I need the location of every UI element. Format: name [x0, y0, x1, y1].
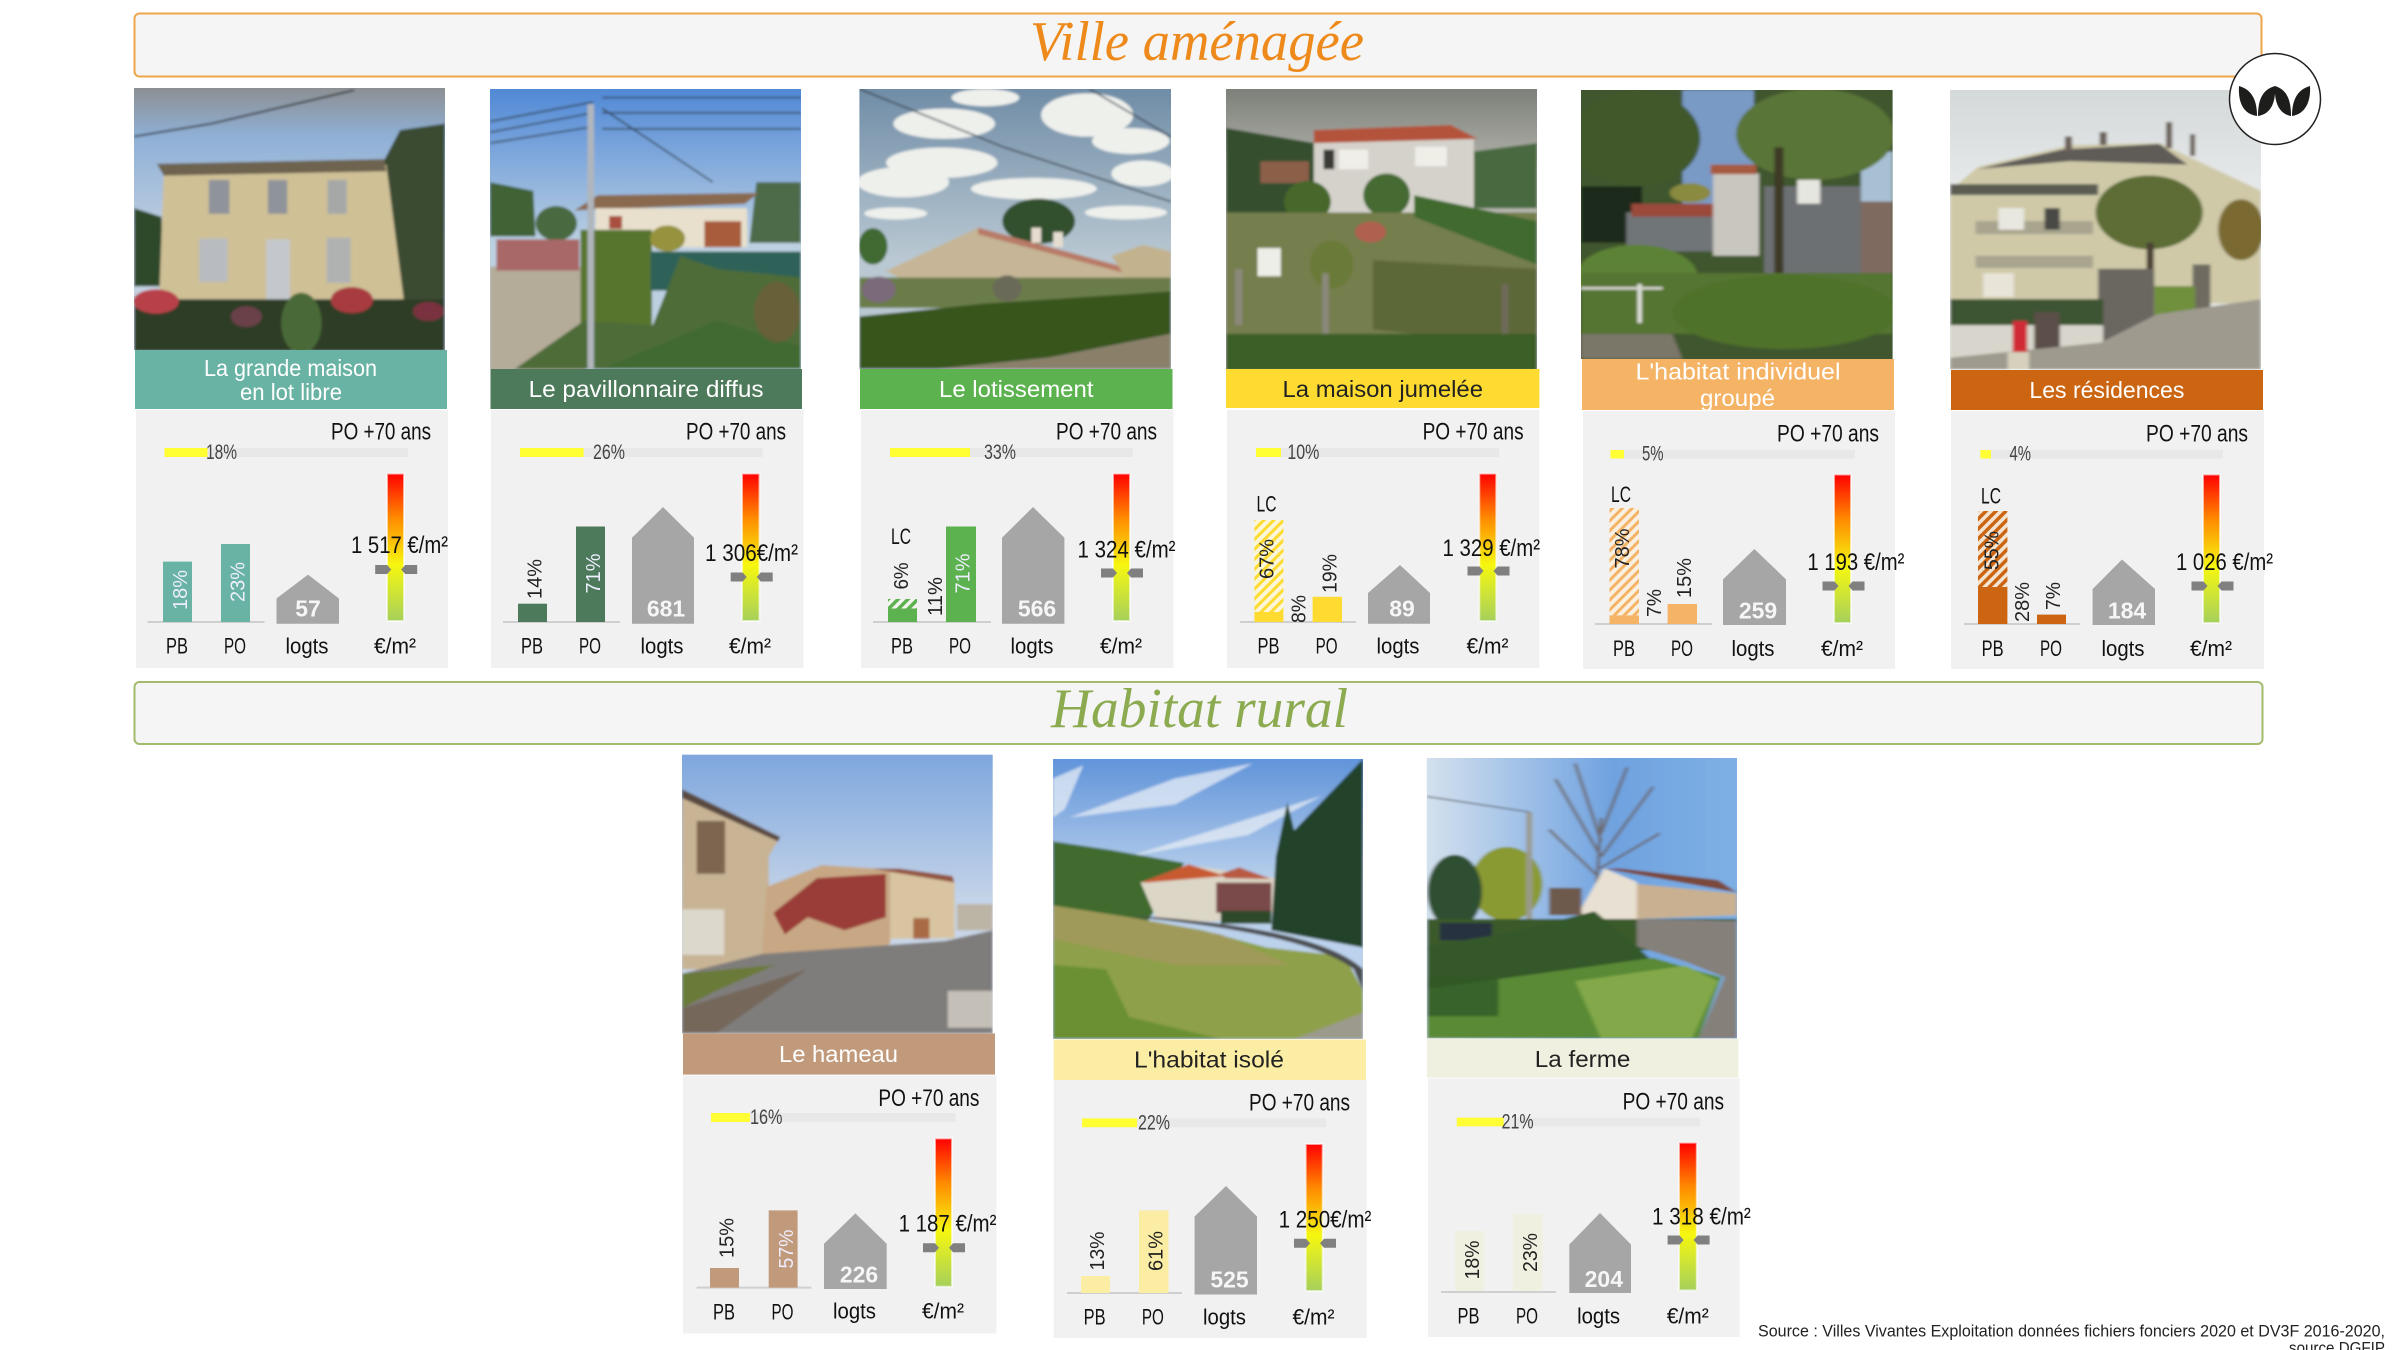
- header: Habitat rural: [134, 678, 2262, 744]
- PB PO bars: 13%: [1087, 1231, 1109, 1270]
- PB LC PO bars: LC: [891, 524, 911, 549]
- PB LC PO bars: [873, 524, 991, 623]
- PB PO bars: [503, 526, 620, 623]
- house logements: 566: [1018, 596, 1056, 622]
- data panel: [1054, 1080, 1371, 1338]
- axis labels: PB: [1458, 1304, 1480, 1328]
- title band: La maison jumelée: [1282, 376, 1483, 402]
- PB LC PO bars: 71%: [953, 553, 975, 594]
- price gauge: 1 318 €/m²: [1652, 1204, 1751, 1230]
- PO +70 ans gauge: [890, 418, 1157, 464]
- title band: Les résidences: [2029, 377, 2184, 403]
- PB PO bars: 71%: [583, 553, 605, 594]
- PB LC PO bars: [1964, 484, 2080, 625]
- PO +70 ans gauge: [164, 418, 431, 464]
- axis labels: PO: [2040, 636, 2062, 661]
- price gauge: [705, 474, 798, 621]
- axis labels: PO: [579, 634, 601, 658]
- price gauge: 1 306€/m²: [705, 540, 798, 567]
- axis labels: logts: [286, 634, 328, 658]
- title band: [1054, 1040, 1366, 1080]
- PO +70 ans gauge: PO +70 ans: [1623, 1088, 1724, 1116]
- house logements: 226: [840, 1262, 878, 1288]
- PB LC PO bars: [1595, 482, 1712, 625]
- title band: La grande maison: [204, 355, 377, 381]
- PB PO bars: 57%: [776, 1229, 798, 1268]
- axis labels: [1458, 1304, 1709, 1328]
- photo: habitat isolé: [1053, 759, 1363, 1039]
- house logements: [1368, 565, 1430, 624]
- axis labels: €/m²: [729, 634, 771, 658]
- title band: groupé: [1700, 385, 1775, 411]
- axis labels: PO: [1516, 1304, 1538, 1328]
- PB LC PO bars: 7%: [1644, 589, 1666, 617]
- price gauge: [899, 1138, 996, 1287]
- data panel: [491, 410, 804, 668]
- PO +70 ans gauge: 4%: [2010, 443, 2031, 466]
- PO +70 ans gauge: [1457, 1088, 1724, 1134]
- house logements: [2093, 560, 2155, 625]
- title band: [1582, 359, 1894, 411]
- axis labels: PO: [1142, 1304, 1164, 1330]
- axis labels: [521, 634, 771, 658]
- PB LC PO bars: 67%: [1256, 539, 1278, 579]
- PO +70 ans gauge: PO +70 ans: [878, 1085, 979, 1112]
- PB PO bars: [697, 1210, 811, 1289]
- price gauge: 1 329 €/m²: [1442, 535, 1540, 562]
- PB PO bars: [148, 544, 264, 623]
- house logements: 89: [1389, 596, 1415, 622]
- axis labels: PO: [949, 634, 971, 658]
- PB PO bars: 61%: [1146, 1231, 1168, 1271]
- photo: grande maison: [134, 88, 445, 350]
- header: Ville aménagée: [134, 11, 2262, 76]
- axis labels: [166, 634, 416, 658]
- axis labels: PO: [1316, 634, 1338, 658]
- house logements: [1723, 549, 1786, 625]
- PB LC PO bars: 28%: [2012, 582, 2034, 622]
- axis labels: logts: [1010, 634, 1054, 658]
- house logements: 204: [1585, 1266, 1623, 1292]
- PB PO bars: 18%: [170, 570, 192, 610]
- price gauge: 1 026 €/m²: [2176, 549, 2273, 576]
- photo: habitat groupé: [1581, 90, 1893, 359]
- axis labels: logts: [1376, 634, 1420, 658]
- house logements: 57: [295, 596, 321, 622]
- price gauge: [351, 474, 448, 621]
- PO +70 ans gauge: PO +70 ans: [1423, 418, 1524, 446]
- title band: Le hameau: [779, 1041, 898, 1067]
- house logements: 681: [647, 596, 685, 622]
- PB LC PO bars: LC: [1611, 482, 1631, 507]
- axis labels: PB: [891, 634, 913, 658]
- price gauge: 1 193 €/m²: [1807, 549, 1904, 576]
- PO +70 ans gauge: 5%: [1642, 443, 1664, 466]
- PO +70 ans gauge: [1980, 420, 2248, 466]
- axis labels: PB: [1613, 636, 1635, 661]
- axis labels: logts: [2102, 636, 2144, 661]
- title band: [490, 369, 802, 409]
- card: L'habitat individuel groupé: [1573, 87, 1904, 669]
- price gauge: [1442, 474, 1540, 621]
- data panel: [1227, 410, 1540, 668]
- title band: Le pavillonnaire diffus: [529, 376, 764, 402]
- axis labels: €/m²: [1667, 1304, 1709, 1328]
- PB LC PO bars: [1240, 492, 1356, 623]
- card: La grande maison en lot libre: [120, 82, 451, 668]
- house logements: [1569, 1213, 1631, 1293]
- PB LC PO bars: 55%: [1982, 531, 2004, 570]
- house logements: [1002, 507, 1064, 624]
- PO +70 ans gauge: PO +70 ans: [1249, 1089, 1350, 1116]
- card: La maison jumelée: [1223, 87, 1543, 668]
- axis labels: [891, 634, 1142, 658]
- title band: L'habitat individuel: [1636, 359, 1840, 385]
- PO +70 ans gauge: PO +70 ans: [1056, 418, 1157, 446]
- PO +70 ans gauge: 33%: [984, 441, 1016, 464]
- axis labels: €/m²: [1821, 636, 1863, 661]
- PB LC PO bars: 15%: [1674, 558, 1696, 598]
- photo: maison jumelée: [1226, 89, 1537, 369]
- axis labels: [713, 1298, 964, 1324]
- axis labels: PB: [1982, 636, 2004, 661]
- title band: [135, 350, 447, 409]
- data panel: [1428, 1078, 1751, 1337]
- PB PO bars: 23%: [228, 562, 250, 602]
- axis labels: logts: [640, 634, 684, 658]
- photo: lotissement: [859, 89, 1171, 369]
- data panel: [1583, 411, 1904, 669]
- photo: résidences: [1950, 90, 2261, 370]
- axis labels: PB: [166, 634, 188, 658]
- card: La ferme: [1422, 756, 1751, 1337]
- PO +70 ans gauge: PO +70 ans: [2146, 420, 2248, 448]
- axis labels: PO: [1671, 636, 1693, 661]
- PB PO bars: [1067, 1210, 1182, 1294]
- PB LC PO bars: 7%: [2043, 582, 2065, 610]
- data panel: [683, 1076, 996, 1334]
- axis labels: PB: [521, 634, 543, 658]
- axis labels: PO: [772, 1300, 794, 1324]
- PO +70 ans gauge: [520, 418, 786, 464]
- axis labels: logts: [833, 1298, 876, 1324]
- title band: [1427, 1039, 1738, 1078]
- title band: La ferme: [1535, 1046, 1630, 1072]
- title: Habitat rural: Habitat rural: [1050, 678, 1348, 740]
- house logements: [632, 507, 694, 624]
- house logements: 525: [1210, 1266, 1249, 1292]
- axis labels: €/m²: [374, 634, 416, 658]
- axis labels: PB: [1258, 634, 1280, 658]
- axis labels: [1258, 634, 1508, 658]
- title band: [1951, 370, 2263, 410]
- axis labels: logts: [1577, 1304, 1620, 1328]
- PB LC PO bars: LC: [1256, 492, 1277, 516]
- title band: L'habitat isolé: [1134, 1046, 1284, 1072]
- PO +70 ans gauge: [1610, 420, 1879, 466]
- axis labels: logts: [1732, 636, 1774, 661]
- price gauge: [1279, 1144, 1371, 1291]
- PB PO bars: 23%: [1520, 1233, 1542, 1272]
- card: Le lotissement: [855, 87, 1176, 668]
- price gauge: [1652, 1143, 1751, 1290]
- axis labels: [1084, 1304, 1334, 1330]
- card: Les résidences: [1947, 87, 2273, 669]
- data panel: [1951, 411, 2273, 669]
- house logements: [276, 575, 339, 624]
- axis labels: €/m²: [1292, 1304, 1334, 1330]
- title band: Le lotissement: [939, 376, 1094, 402]
- PB PO bars: 14%: [524, 559, 546, 599]
- PB PO bars: 15%: [716, 1218, 738, 1258]
- PO +70 ans gauge: PO +70 ans: [1777, 420, 1879, 448]
- axis labels: [1982, 636, 2232, 661]
- price gauge: 1 324 €/m²: [1078, 536, 1176, 564]
- photo: hameau: [682, 754, 993, 1034]
- card: L'habitat isolé: [1051, 757, 1371, 1338]
- price gauge: 1 250€/m²: [1279, 1206, 1371, 1234]
- icon: Villes Vivantes logo: [2230, 54, 2320, 144]
- PB LC PO bars: 19%: [1320, 554, 1342, 593]
- price gauge: 1 517 €/m²: [351, 532, 448, 559]
- data panel: [861, 410, 1176, 668]
- PB PO bars: [1441, 1214, 1556, 1293]
- title band: [1226, 369, 1539, 408]
- PO +70 ans gauge: [1256, 418, 1524, 464]
- price gauge: [1078, 474, 1176, 621]
- PO +70 ans gauge: [1082, 1089, 1350, 1134]
- data panel: [136, 410, 448, 668]
- PO +70 ans gauge: [711, 1085, 979, 1129]
- PO +70 ans gauge: 18%: [206, 441, 237, 464]
- card: Le hameau: [679, 752, 996, 1334]
- house logements: 259: [1739, 598, 1777, 624]
- PO +70 ans gauge: 26%: [593, 441, 625, 464]
- axis labels: [1613, 636, 1863, 661]
- PB PO bars: 18%: [1462, 1240, 1484, 1280]
- price gauge: [2176, 474, 2273, 623]
- house logements: [824, 1213, 887, 1289]
- PO +70 ans gauge: 16%: [750, 1106, 782, 1129]
- PB LC PO bars: 8%: [1288, 595, 1310, 623]
- price gauge: [1807, 474, 1904, 623]
- PO +70 ans gauge: 22%: [1138, 1111, 1170, 1134]
- PB LC PO bars: LC: [1981, 484, 2001, 508]
- title band: [683, 1033, 995, 1075]
- axis labels: €/m²: [2190, 636, 2232, 661]
- axis labels: logts: [1203, 1304, 1246, 1330]
- title band: [860, 369, 1172, 409]
- house logements: 184: [2108, 598, 2146, 624]
- axis labels: PO: [224, 634, 246, 658]
- axis labels: €/m²: [1100, 634, 1142, 658]
- card: Le pavillonnaire diffus: [487, 87, 805, 668]
- PB LC PO bars: 11%: [925, 577, 947, 616]
- PO +70 ans gauge: 10%: [1287, 441, 1319, 464]
- PO +70 ans gauge: PO +70 ans: [686, 418, 786, 446]
- title band: en lot libre: [240, 379, 342, 405]
- title: Ville aménagée: Ville aménagée: [1030, 11, 1364, 73]
- price gauge: 1 187 €/m²: [899, 1210, 996, 1237]
- PO +70 ans gauge: 21%: [1502, 1110, 1534, 1134]
- house logements: [1195, 1186, 1257, 1294]
- axis labels: PB: [713, 1300, 735, 1324]
- PB LC PO bars: 78%: [1612, 528, 1634, 568]
- photo: pavillon: [490, 89, 801, 369]
- source note: [1758, 1322, 2385, 1350]
- axis labels: €/m²: [1466, 634, 1508, 658]
- axis labels: PB: [1084, 1304, 1106, 1330]
- PB LC PO bars: 6%: [891, 562, 913, 590]
- photo: ferme: [1426, 758, 1737, 1038]
- PO +70 ans gauge: PO +70 ans: [331, 418, 431, 446]
- axis labels: €/m²: [922, 1298, 964, 1324]
